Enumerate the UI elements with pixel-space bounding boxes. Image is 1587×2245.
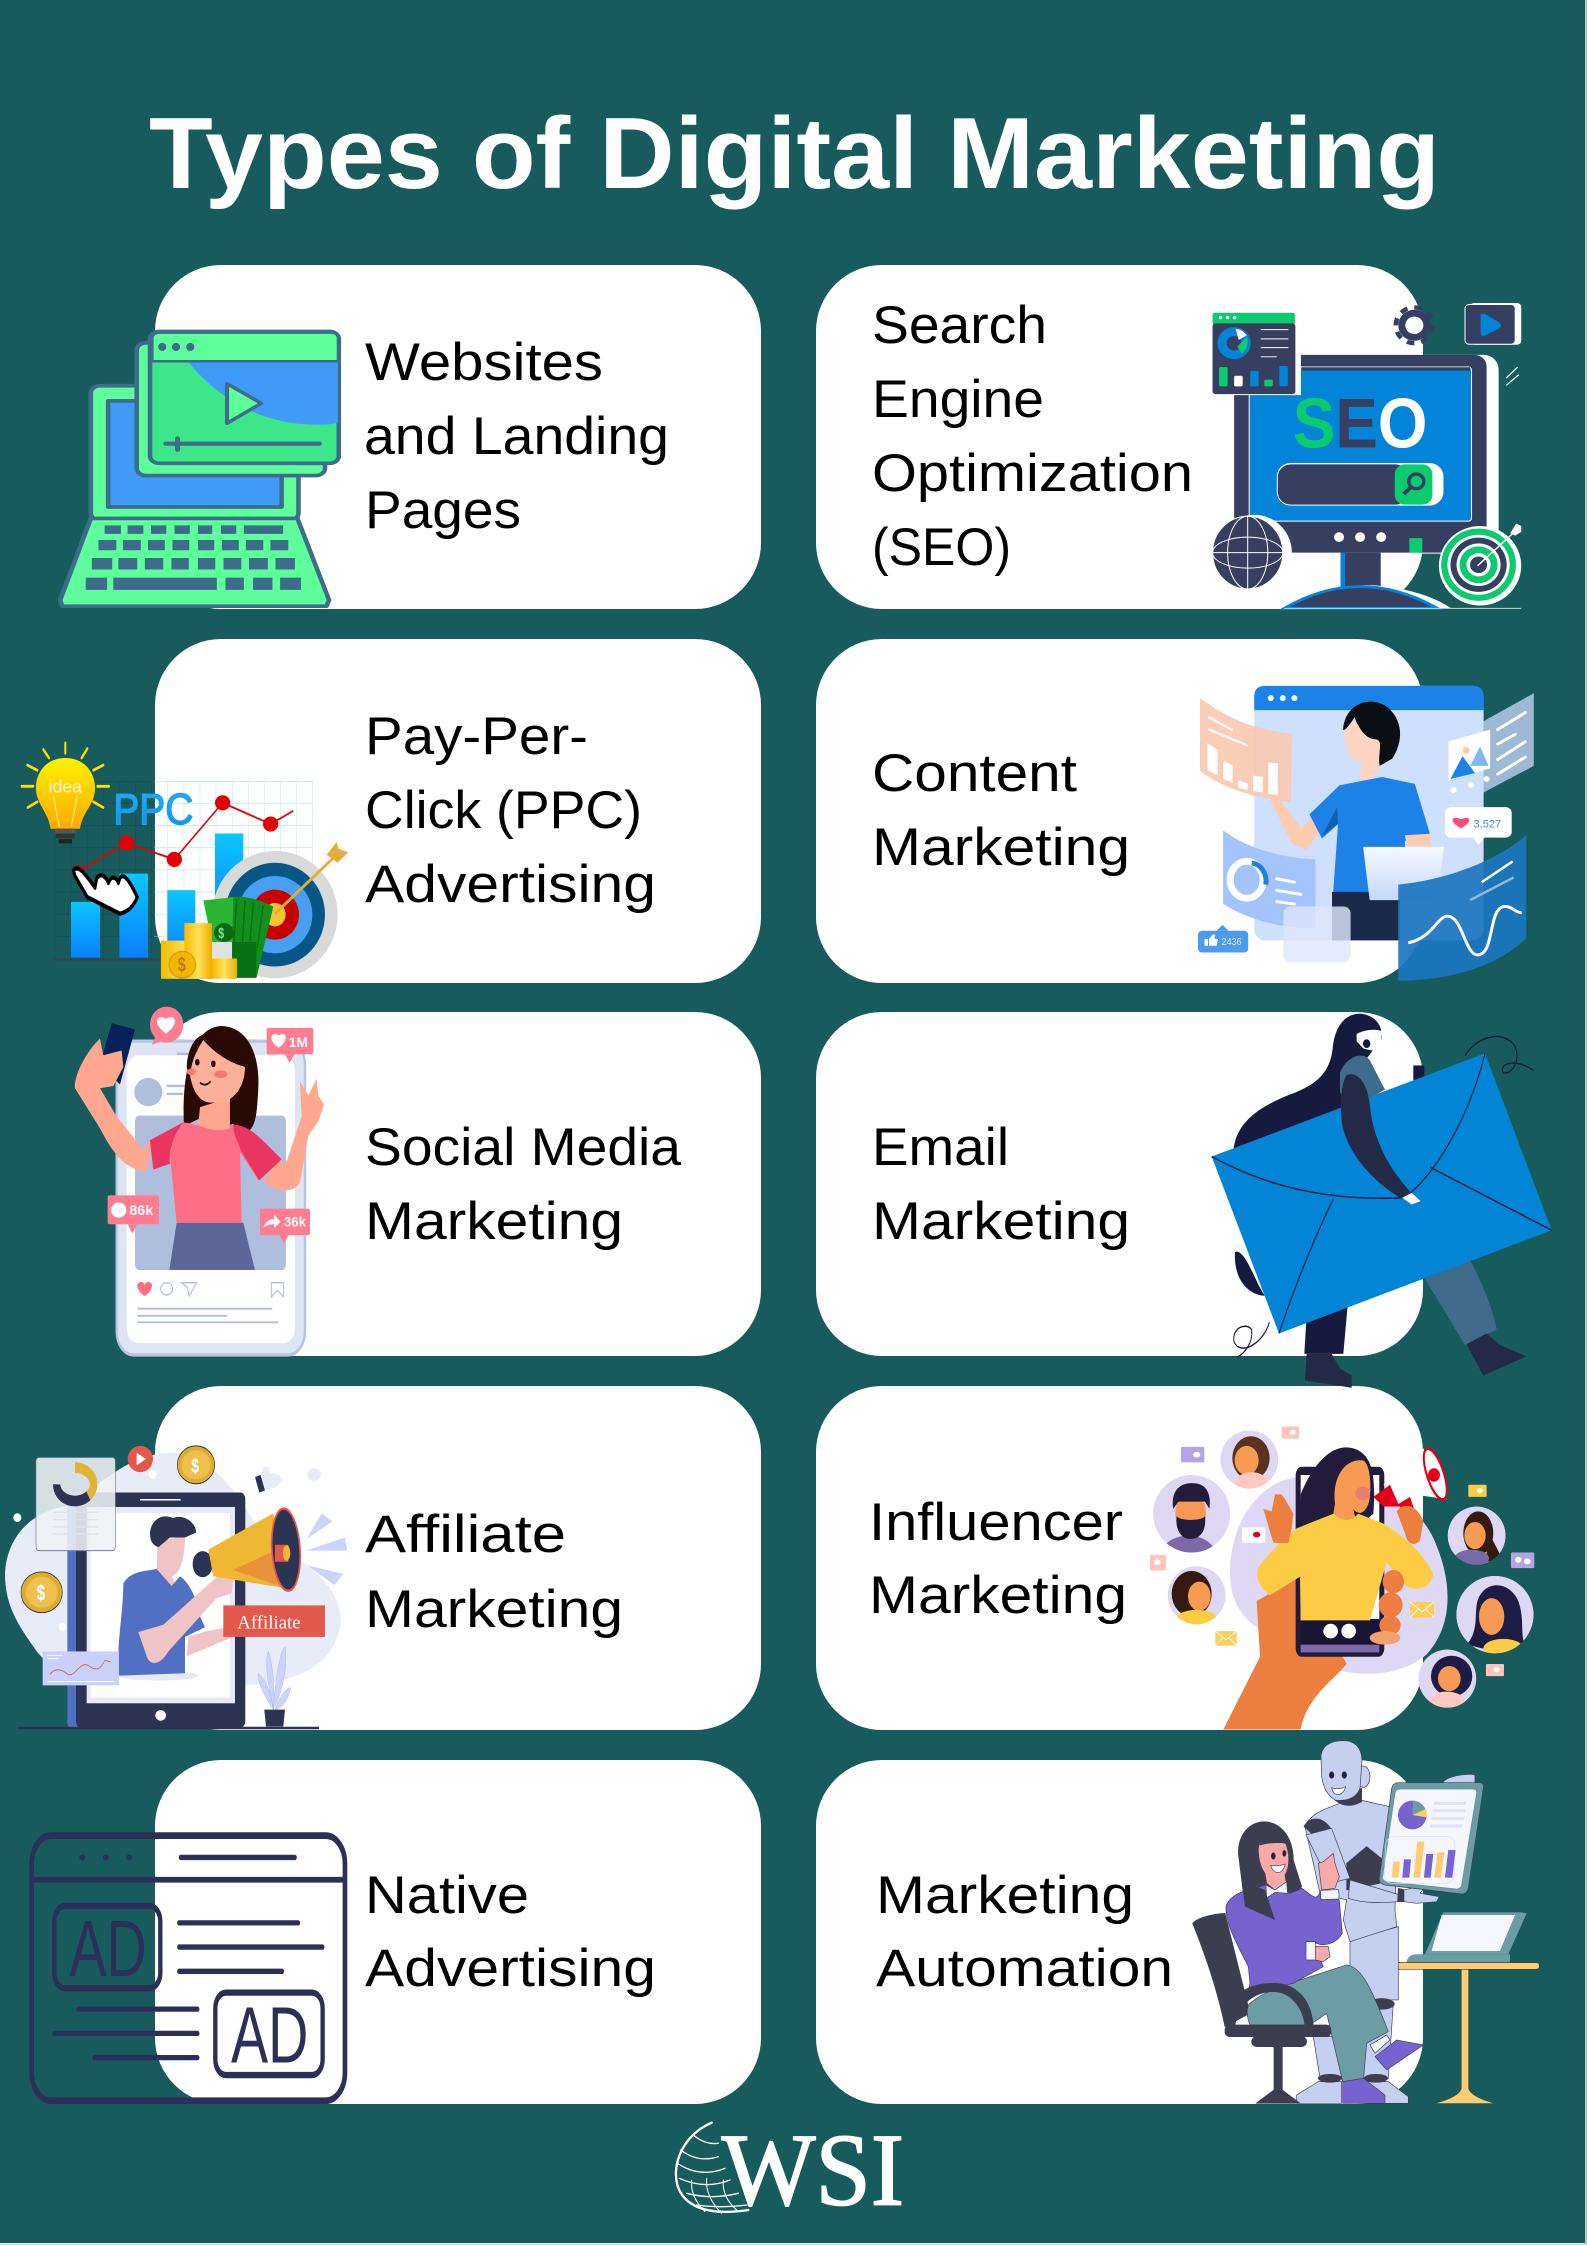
icon: PPC chart and target (22, 743, 348, 979)
arm (1341, 1074, 1410, 1199)
icon: woman carrying large envelope (1212, 1014, 1552, 1388)
icon: person with content panels (1198, 686, 1534, 981)
panel: affiliate marketing (5, 1386, 761, 1730)
panel: search engine optimization (816, 265, 1521, 609)
heading: websites and landing pages: Websites (365, 333, 603, 392)
chair (1193, 1913, 1307, 2103)
card: websites (155, 265, 761, 609)
globe mark (676, 2123, 748, 2213)
likes badge 2436 (1198, 925, 1248, 953)
card: automation (816, 1760, 1423, 2104)
gold coins: $ (178, 953, 186, 976)
panel: influencer marketing (816, 1386, 1534, 1730)
dashboard card (1213, 313, 1301, 395)
icon: woman and robot with tablet (1193, 1741, 1539, 2103)
card: affiliate (155, 1386, 761, 1730)
title: Types of Digital Marketing (149, 98, 1440, 210)
hair (1233, 1014, 1382, 1155)
heading: search engine optimization: Search (872, 296, 1047, 355)
blue wave panel (1398, 835, 1526, 981)
heading: marketing automation: Automation (876, 1939, 1173, 1998)
heading: search engine optimization: Engine (872, 370, 1044, 429)
heading: content marketing: Marketing (872, 818, 1130, 877)
heart bubble (150, 1007, 183, 1045)
affiliate label: Affiliate (237, 1611, 301, 1633)
envelopes (1215, 1602, 1434, 1646)
panel: websites and landing pages (60, 265, 761, 609)
gold coins (161, 923, 237, 979)
image tile (1448, 730, 1490, 793)
chat bubbles (1150, 1427, 1534, 1676)
heading: websites and landing pages: Pages (365, 481, 521, 540)
heading: pay-per-click advertising: Click (PPC) (365, 781, 642, 840)
heading: native advertising: Native (365, 1866, 529, 1925)
likes badge 2436: 2436 (1222, 937, 1242, 948)
likes bubble 3,527: 3,527 (1474, 819, 1501, 830)
bubble 36k (260, 1209, 310, 1244)
heading: affiliate marketing (365, 1505, 623, 1639)
man (118, 1516, 233, 1681)
heading: content marketing (872, 744, 1130, 877)
heading: influencer marketing: Influencer (869, 1493, 1123, 1552)
icon: man with megaphone on tablet (5, 1446, 347, 1728)
AD box right: AD (231, 1990, 308, 2080)
trailing leg and boot (1425, 1259, 1527, 1376)
lightbulb (22, 743, 109, 843)
card: content (816, 639, 1423, 983)
card: PPC (155, 639, 761, 983)
blue left panel (1223, 830, 1315, 928)
woman (75, 1023, 324, 1270)
heading: search engine optimization: Optimization (872, 444, 1193, 503)
card: email (816, 1012, 1423, 1356)
heading: marketing automation (876, 1866, 1173, 1998)
woman in yellow (1257, 1447, 1433, 1645)
hand holding phone (1223, 1577, 1347, 1729)
lightbulb: idea (49, 777, 82, 797)
heading: content marketing: Content (872, 744, 1077, 803)
like icon (255, 1475, 265, 1492)
heading: influencer marketing: Marketing (869, 1566, 1127, 1625)
heading: marketing automation: Marketing (876, 1866, 1134, 1925)
bubble 36k: 36k (284, 1214, 306, 1230)
gear (1396, 307, 1433, 343)
card: native (155, 1760, 761, 2104)
money stack: $ (218, 924, 225, 942)
heading: email marketing: Marketing (872, 1192, 1130, 1251)
panel: marketing automation (816, 1741, 1539, 2104)
bubble 86k: 86k (129, 1202, 154, 1218)
affiliate label (223, 1605, 325, 1637)
heading: email marketing (872, 1118, 1130, 1251)
hand cursor (73, 868, 137, 914)
money stack (203, 897, 273, 978)
globe (1213, 515, 1292, 590)
video icon (1465, 303, 1521, 345)
card: social (155, 1012, 761, 1356)
tablet with charts (1379, 1774, 1483, 1894)
heading: pay-per-click advertising (365, 707, 656, 914)
heading: affiliate marketing: Marketing (365, 1580, 623, 1639)
heading: websites and landing pages (364, 333, 669, 540)
phone (1296, 1467, 1384, 1657)
icon: SEO monitor: SEO (1293, 385, 1427, 463)
card: influencer (816, 1386, 1423, 1730)
heading: pay-per-click advertising: Advertising (365, 855, 656, 914)
megaphone (1373, 1444, 1451, 1528)
orange panel (1200, 698, 1292, 802)
bubble 86k (108, 1195, 159, 1234)
heading: affiliate marketing: Affiliate (365, 1505, 566, 1564)
target (1439, 524, 1521, 605)
heading: social media marketing: Marketing (365, 1192, 623, 1251)
heading: social media marketing: Social Media (365, 1118, 682, 1177)
panel: pay-per-click advertising (22, 639, 761, 983)
donut card (36, 1458, 115, 1551)
panel: email marketing (816, 1012, 1552, 1388)
panel: content marketing (816, 639, 1534, 983)
squiggles (1465, 1037, 1533, 1073)
play button (128, 1446, 153, 1472)
chart card (43, 1651, 119, 1685)
heading: pay-per-click advertising: Pay-Per- (365, 707, 588, 766)
likes bubble 3,527 (1445, 807, 1512, 845)
robot (1297, 1741, 1439, 2103)
panel: native advertising (32, 1760, 761, 2104)
front leg and boot (1304, 1305, 1352, 1388)
heading: search engine optimization: (SEO) (872, 518, 1011, 577)
heading: native advertising (365, 1866, 656, 1998)
logo: WSI: WSI (722, 2113, 904, 2227)
coins: $ (191, 1454, 199, 1478)
megaphone (193, 1507, 347, 1593)
icon: SEO monitor (1213, 303, 1521, 608)
table and laptop (1390, 1912, 1539, 2103)
plant (258, 1647, 291, 1727)
coins (21, 1446, 215, 1613)
woman (1226, 1822, 1423, 2103)
bubble 1M (267, 1028, 313, 1063)
panel: social media marketing (75, 1007, 761, 1356)
chair armrest and seat (1225, 1983, 1331, 2037)
envelope (1212, 1053, 1552, 1333)
heading: influencer marketing (869, 1493, 1127, 1625)
heading: native advertising: Advertising (365, 1939, 656, 1998)
icon: influencer with megaphone and followers (1150, 1427, 1534, 1729)
icon: browser window with ads (32, 1836, 345, 2101)
coins: $ (37, 1582, 45, 1606)
PPC label: PPC (113, 785, 193, 833)
heading: search engine optimization (872, 296, 1193, 577)
heading: social media marketing (365, 1118, 682, 1251)
AD box left: AD (69, 1904, 147, 1994)
heading: websites and landing pages: and Landing (364, 407, 669, 466)
icon: laptop with video window (60, 331, 339, 606)
bubble 1M: 1M (289, 1034, 308, 1050)
person (1252, 702, 1431, 940)
icon: woman taking selfie in phone (75, 1007, 324, 1355)
heading: email marketing: Email (872, 1118, 1009, 1177)
target (212, 842, 348, 978)
card: SEO (816, 265, 1423, 609)
